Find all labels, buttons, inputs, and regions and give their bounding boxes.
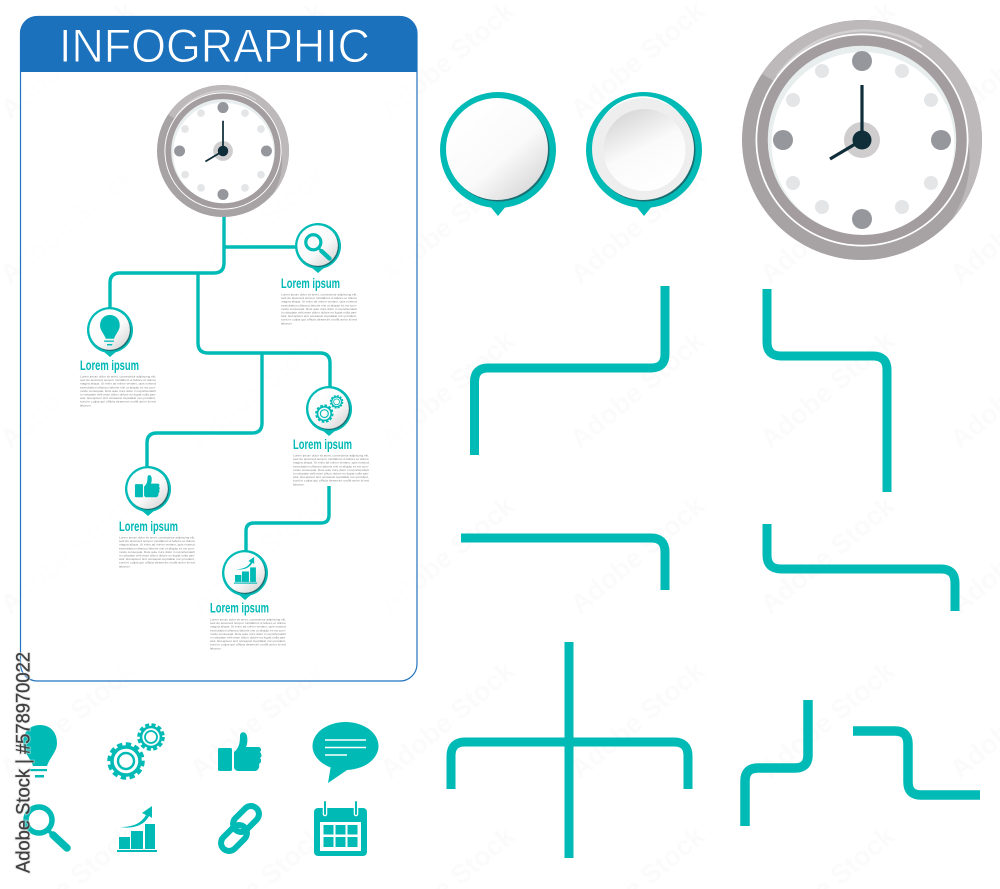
icon: search bbox=[306, 235, 330, 259]
pin: search bbox=[295, 223, 341, 273]
icon: search bbox=[26, 807, 67, 848]
icon: light bulb bbox=[23, 725, 57, 778]
text block: search: modo consequat. Duis aute irure dolor in reprehenderit bbox=[281, 307, 357, 311]
text block: idea: atur. Excepteur sint occaecat cupidatat non proident, bbox=[80, 396, 156, 400]
connector: cross bbox=[451, 642, 688, 858]
icon: gears bbox=[316, 396, 342, 422]
connector: low corner bbox=[767, 524, 955, 611]
connector: small Z bbox=[853, 731, 980, 795]
panel header bar bbox=[20, 16, 417, 72]
text block: thumbs up: sunt in culpa qui officia deserunt mollit anim id est bbox=[119, 561, 195, 565]
connector lines: timeline paths bbox=[110, 216, 330, 551]
text block: growth chart: Lorem ipsum dolor sit amet, consectetur adipiscing elit, bbox=[210, 618, 286, 622]
icon: light bulb bbox=[100, 315, 120, 345]
text block: growth chart: Lorem ipsum bbox=[210, 600, 269, 616]
icon: thumbs up bbox=[218, 732, 262, 771]
text block: thumbs up: magna aliqua. Ut enim ad minim veniam, quis nostrud bbox=[119, 543, 195, 547]
pin: growth chart bbox=[222, 550, 268, 600]
text block: idea: exercitation ullamco laboris nisi ut aliquip ex ea com- bbox=[80, 385, 156, 389]
pin: thumbs up bbox=[125, 466, 171, 516]
pin: idea bbox=[87, 307, 133, 357]
text block: idea: sunt in culpa qui officia deserunt mollit anim id est bbox=[80, 400, 156, 404]
icon: thumbs up bbox=[135, 475, 160, 497]
text block: idea: magna aliqua. Ut enim ad minim veniam, quis nostrud bbox=[80, 382, 156, 386]
text block: growth chart: sunt in culpa qui officia deserunt mollit anim id est bbox=[210, 643, 286, 647]
icon: speech bubble bbox=[312, 722, 378, 783]
text block: idea: Lorem ipsum bbox=[80, 357, 139, 373]
connector: elbow right bbox=[767, 289, 887, 492]
text block: growth chart: magna aliqua. Ut enim ad minim veniam, quis nostrud bbox=[210, 625, 286, 629]
text block: thumbs up: Lorem ipsum dolor sit amet, consectetur adipiscing elit, bbox=[119, 536, 195, 540]
icon: calendar bbox=[314, 802, 367, 856]
text block: gears: Lorem ipsum bbox=[293, 436, 352, 452]
text block: gears: exercitation ullamco laboris nisi ut aliquip ex ea com- bbox=[293, 464, 369, 468]
text block: growth chart: sed do eiusmod tempor incididunt ut labore et dolore bbox=[210, 621, 286, 625]
text block: thumbs up: exercitation ullamco laboris nisi ut aliquip ex ea com- bbox=[119, 546, 195, 550]
text block: idea: laborum. bbox=[80, 403, 92, 407]
text block: thumbs up: in voluptate velit esse cillum dolore eu fugiat nulla pari- bbox=[119, 554, 195, 558]
text block: search bbox=[281, 275, 357, 325]
icon: growth chart bbox=[234, 557, 257, 584]
text block: search: Lorem ipsum dolor sit amet, consectetur adipiscing elit, bbox=[281, 292, 357, 296]
text block: gears: atur. Excepteur sint occaecat cupidatat non proident, bbox=[293, 475, 369, 479]
text block: gears: laborum. bbox=[293, 482, 305, 486]
clock: small bbox=[157, 85, 289, 217]
text block: gears: modo consequat. Duis aute irure dolor in reprehenderit bbox=[293, 468, 369, 472]
connector: small S bbox=[745, 700, 808, 826]
text block: idea: sed do eiusmod tempor incididunt ut labore et dolore bbox=[80, 378, 156, 382]
icon: growth chart bbox=[117, 806, 157, 852]
connector: elbow left bbox=[474, 286, 665, 455]
text block: growth chart: atur. Excepteur sint occaecat cupidatat non proident, bbox=[210, 639, 286, 643]
pin: gears bbox=[306, 386, 352, 436]
text block: gears: sunt in culpa qui officia deserunt mollit anim id est bbox=[293, 479, 369, 483]
watermark id: Adobe Stock | #578970022 bbox=[12, 652, 34, 873]
pin: blank flat bbox=[440, 92, 556, 216]
text block: growth chart bbox=[210, 600, 286, 650]
text block: gears: in voluptate velit esse cillum dolore eu fugiat nulla pari- bbox=[293, 472, 369, 476]
clock: large bbox=[742, 20, 982, 260]
text block: search: sed do eiusmod tempor incididunt ut labore et dolore bbox=[281, 296, 357, 300]
text block: gears bbox=[293, 436, 369, 486]
watermark id: Adobe Stock | #578970022 bbox=[12, 652, 34, 873]
text block: gears: magna aliqua. Ut enim ad minim veniam, quis nostrud bbox=[293, 461, 369, 465]
panel: infographic card bbox=[20, 16, 417, 681]
text block: search: in voluptate velit esse cillum dolore eu fugiat nulla pari- bbox=[281, 310, 357, 314]
text block: idea: in voluptate velit esse cillum dolore eu fugiat nulla pari- bbox=[80, 392, 156, 396]
connector: short corner bbox=[461, 538, 665, 590]
icon: gears bbox=[110, 725, 163, 778]
text block: growth chart: exercitation ullamco laboris nisi ut aliquip ex ea com- bbox=[210, 628, 286, 632]
text block: idea: Lorem ipsum dolor sit amet, consectetur adipiscing elit, bbox=[80, 374, 156, 378]
text block: search: sunt in culpa qui officia deserunt mollit anim id est bbox=[281, 318, 357, 322]
text block: idea: modo consequat. Duis aute irure dolor in reprehenderit bbox=[80, 389, 156, 393]
text block: growth chart: laborum. bbox=[210, 646, 222, 650]
text block: thumbs up: atur. Excepteur sint occaecat cupidatat non proident, bbox=[119, 557, 195, 561]
text block: search: magna aliqua. Ut enim ad minim veniam, quis nostrud bbox=[281, 300, 357, 304]
text block: thumbs up: sed do eiusmod tempor incididunt ut labore et dolore bbox=[119, 539, 195, 543]
text block: search: exercitation ullamco laboris nisi ut aliquip ex ea com- bbox=[281, 303, 357, 307]
text block: gears: sed do eiusmod tempor incididunt ut labore et dolore bbox=[293, 457, 369, 461]
icon: chain link bbox=[218, 803, 262, 854]
text block: thumbs up bbox=[119, 518, 195, 568]
text block: thumbs up: modo consequat. Duis aute irure dolor in reprehenderit bbox=[119, 550, 195, 554]
text block: search: laborum. bbox=[281, 321, 293, 325]
text block: idea bbox=[80, 357, 156, 407]
text block: thumbs up: Lorem ipsum bbox=[119, 518, 178, 534]
text block: gears: Lorem ipsum dolor sit amet, consectetur adipiscing elit, bbox=[293, 454, 369, 458]
text block: search: Lorem ipsum bbox=[281, 275, 340, 291]
title: INFOGRAPHIC bbox=[59, 19, 370, 72]
pin: blank inset bbox=[586, 92, 702, 216]
text block: growth chart: modo consequat. Duis aute irure dolor in reprehenderit bbox=[210, 632, 286, 636]
text block: thumbs up: laborum. bbox=[119, 564, 131, 568]
text block: growth chart: in voluptate velit esse cillum dolore eu fugiat nulla pari- bbox=[210, 636, 286, 640]
text block: search: atur. Excepteur sint occaecat cupidatat non proident, bbox=[281, 314, 357, 318]
